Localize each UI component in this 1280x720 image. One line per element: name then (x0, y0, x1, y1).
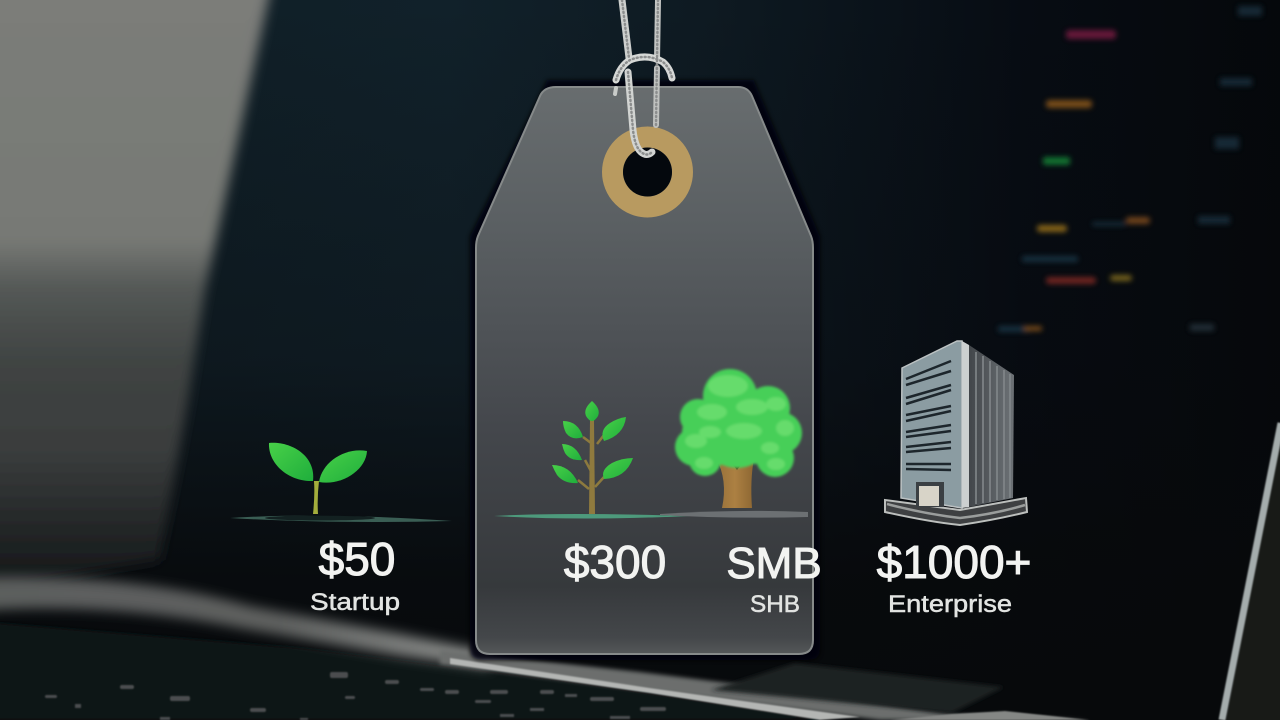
string behind tag (622, 0, 658, 60)
laptop hinge edge highlight (0, 577, 490, 668)
tier 2: sapling (494, 401, 808, 588)
label: Enterprise: Enterprise (888, 591, 1012, 618)
icon: tree (675, 369, 802, 508)
tag eyelet (612, 137, 682, 207)
icon: sapling (494, 401, 808, 518)
tier 1: startup (230, 443, 452, 616)
label: Startup: Startup (310, 589, 400, 616)
price: $1000+: $1000+ (877, 536, 1031, 588)
keyboard key specks (45, 672, 666, 720)
icon: sprout (230, 443, 452, 522)
tier 2 alt: tree (675, 369, 822, 618)
price: $50: $50 (319, 533, 395, 585)
label: SHB: SHB (750, 591, 800, 618)
price: $300: $300 (564, 536, 666, 588)
heading: SMB: SMB (726, 539, 822, 588)
icon: office building (885, 341, 1027, 525)
screen right bezel (1226, 436, 1280, 720)
price tag (470, 80, 820, 660)
blurred code on screen (998, 6, 1262, 332)
tier 3: enterprise (877, 341, 1031, 618)
string and clip (615, 0, 672, 154)
